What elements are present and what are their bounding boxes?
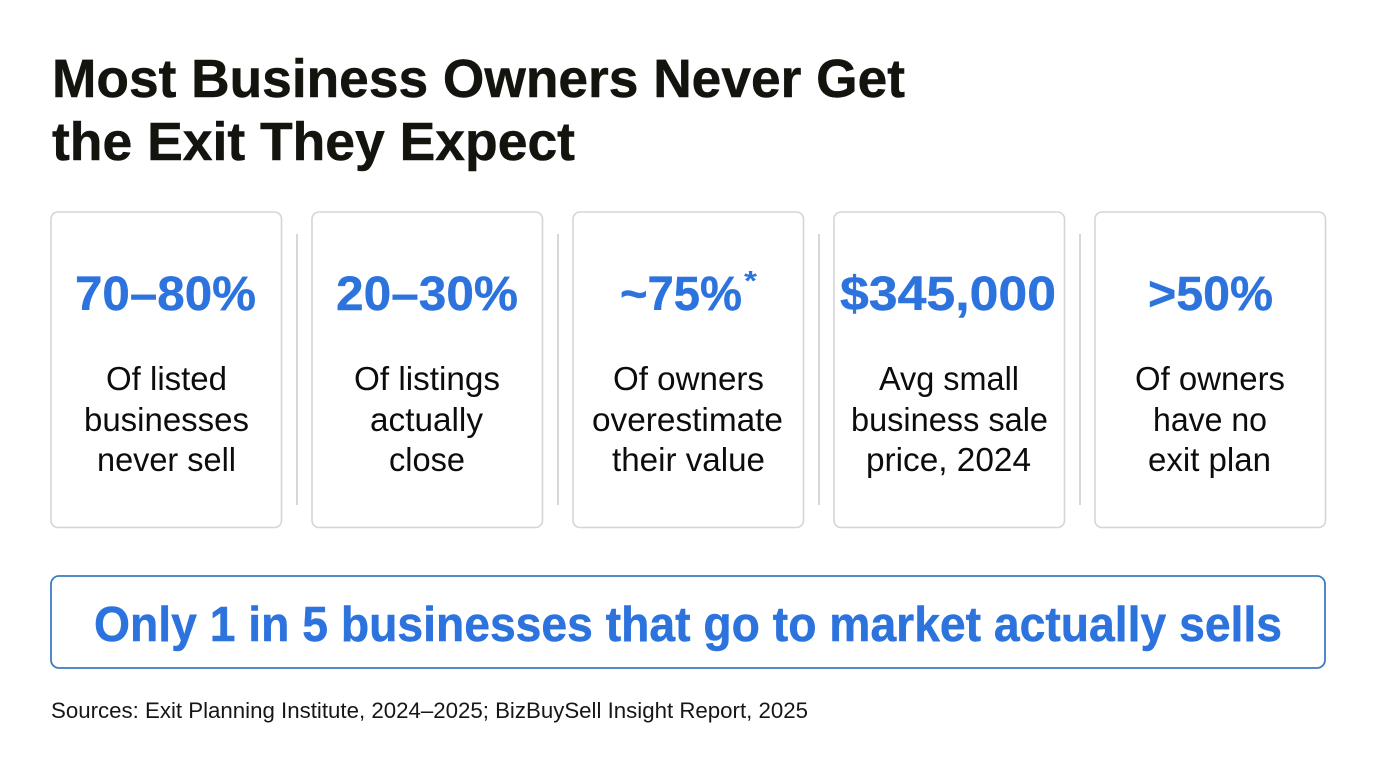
stat description: no exit plan: have no [1153,401,1267,438]
stat value: $345,000: $345,000 [840,268,1056,321]
stat description: no exit plan [1135,360,1285,478]
title: the Exit They Expect [52,112,575,172]
stat description: listed businesses: businesses [84,401,249,438]
title [52,49,905,172]
stat description: no exit plan: Of owners [1135,360,1285,397]
panel: stat 70–80% [51,212,282,528]
stat description: owners overestimate: Of owners [613,360,764,397]
stat description: no exit plan: exit plan [1148,441,1271,478]
stat description: listed businesses: Of listed [106,360,227,397]
stat description: listings close: actually [370,401,484,438]
stat description: average sale price: price, 2024 [866,441,1031,478]
panel: stat 20–30% [312,212,542,528]
stat value: 70–80%: 70–80% [75,268,256,321]
stat description: average sale price: business sale [851,401,1048,438]
stat description: owners overestimate: overestimate [592,401,783,438]
stat description: listed businesses: never sell [97,441,236,478]
stat description: listings close: Of listings [354,360,500,397]
title: Most Business Owners Never Get [52,49,905,109]
stat description: listed businesses [84,360,249,478]
stat description: listings close [354,360,500,478]
stat description: average sale price: Avg small [879,360,1019,397]
stat value: >50%: >50% [1148,268,1273,321]
sources: Sources: Exit Planning Institute, 2024–2025; BizBuySell Insight Report, 2025 [51,698,808,723]
stat description: owners overestimate: their value [612,441,765,478]
footnote asterisk: * [744,265,757,296]
stat description: listings close: close [389,441,465,478]
callout text: Only 1 in 5 businesses that go to market actually sells [94,598,1282,652]
stat value: 20–30%: 20–30% [336,268,518,321]
callout banner [51,576,1325,668]
stat description: average sale price [851,360,1048,478]
stat value: ~75%: ~75% [620,268,742,321]
panel: stat ~75% [573,212,804,528]
panel: stat >50% [1095,212,1326,528]
stat description: owners overestimate [592,360,783,478]
panel: stat $345,000 [834,212,1064,528]
